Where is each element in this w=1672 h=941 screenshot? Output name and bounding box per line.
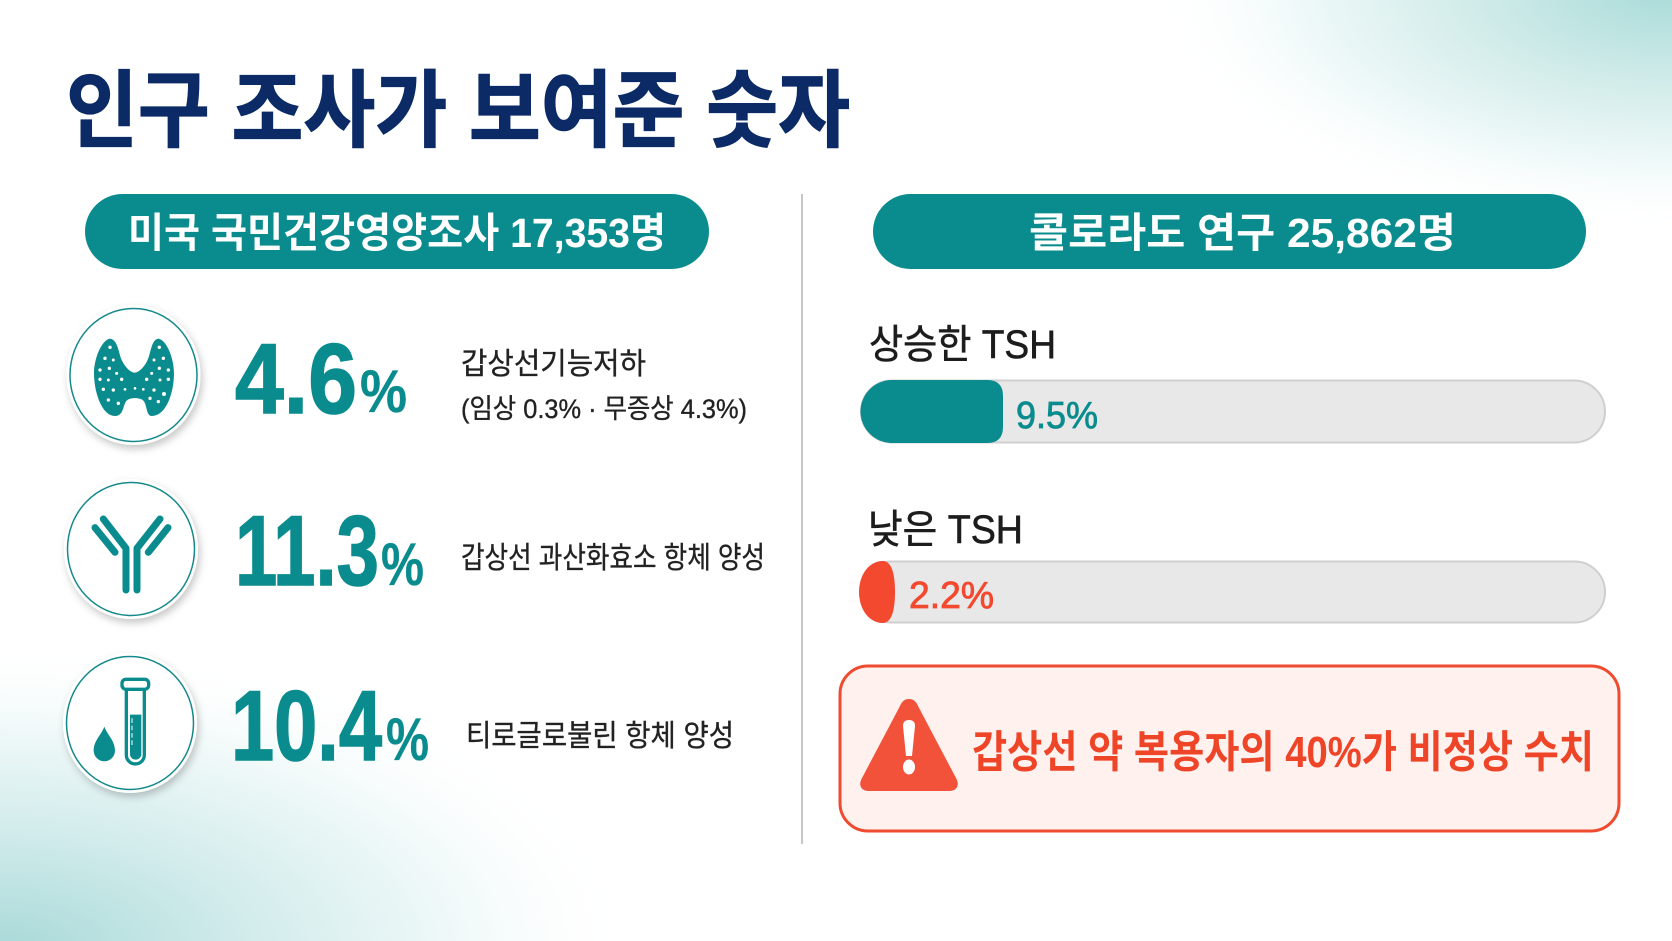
chart: elevated TSH bar: 9.5% [1016,395,1098,437]
panel: left heading pill [85,194,709,269]
stat: 10.4%: 10.4 [231,670,382,781]
stat: 11.3%: 11.3 [235,495,379,606]
panel: right heading pill: 콜로라도 연구 25,862명 [1029,210,1456,256]
text: TPO antibody label: 갑상선 과산화효소 항체 양성 [461,542,765,575]
icon: warning triangle [860,699,958,791]
chart: elevated TSH bar: 상승한 TSH [869,323,1056,367]
stat: 10.4%: % [386,706,429,773]
callout: warning: 갑상선 약 복용자의 40%가 비정상 수치 [972,728,1594,777]
text: hypothyroidism label [461,348,747,424]
icon: antibody [64,479,198,619]
stat: 4.6%: 4.6 [235,323,357,434]
stat row: hypothyroidism [66,305,747,445]
panel: right heading pill [873,194,1586,269]
text: hypothyroidism label: (임상 0.3% · 무증상 4.3%) [461,394,747,424]
text: thyroglobulin antibody label: 티로글로불린 항체 양성 [466,720,734,753]
callout: warning [840,666,1619,831]
chart: elevated TSH bar [860,323,1605,443]
icon: thyroid [66,305,200,445]
icon: test tube and drop [63,653,197,793]
stat: 11.3%: % [381,531,424,598]
chart: low TSH bar [859,508,1605,623]
chart: low TSH bar: 2.2% [909,575,994,617]
title: 인구 조사가 보여준 숫자 [66,64,850,158]
chart: low TSH bar: 낮은 TSH [868,508,1023,552]
stat: 4.6%: % [360,358,407,425]
text: hypothyroidism label: 갑상선기능저하 [461,348,646,381]
stat row: thyroglobulin antibody [63,653,734,793]
panel: left heading pill: 미국 국민건강영양조사 17,353명 [128,210,666,256]
stat row: TPO antibody [64,479,765,619]
